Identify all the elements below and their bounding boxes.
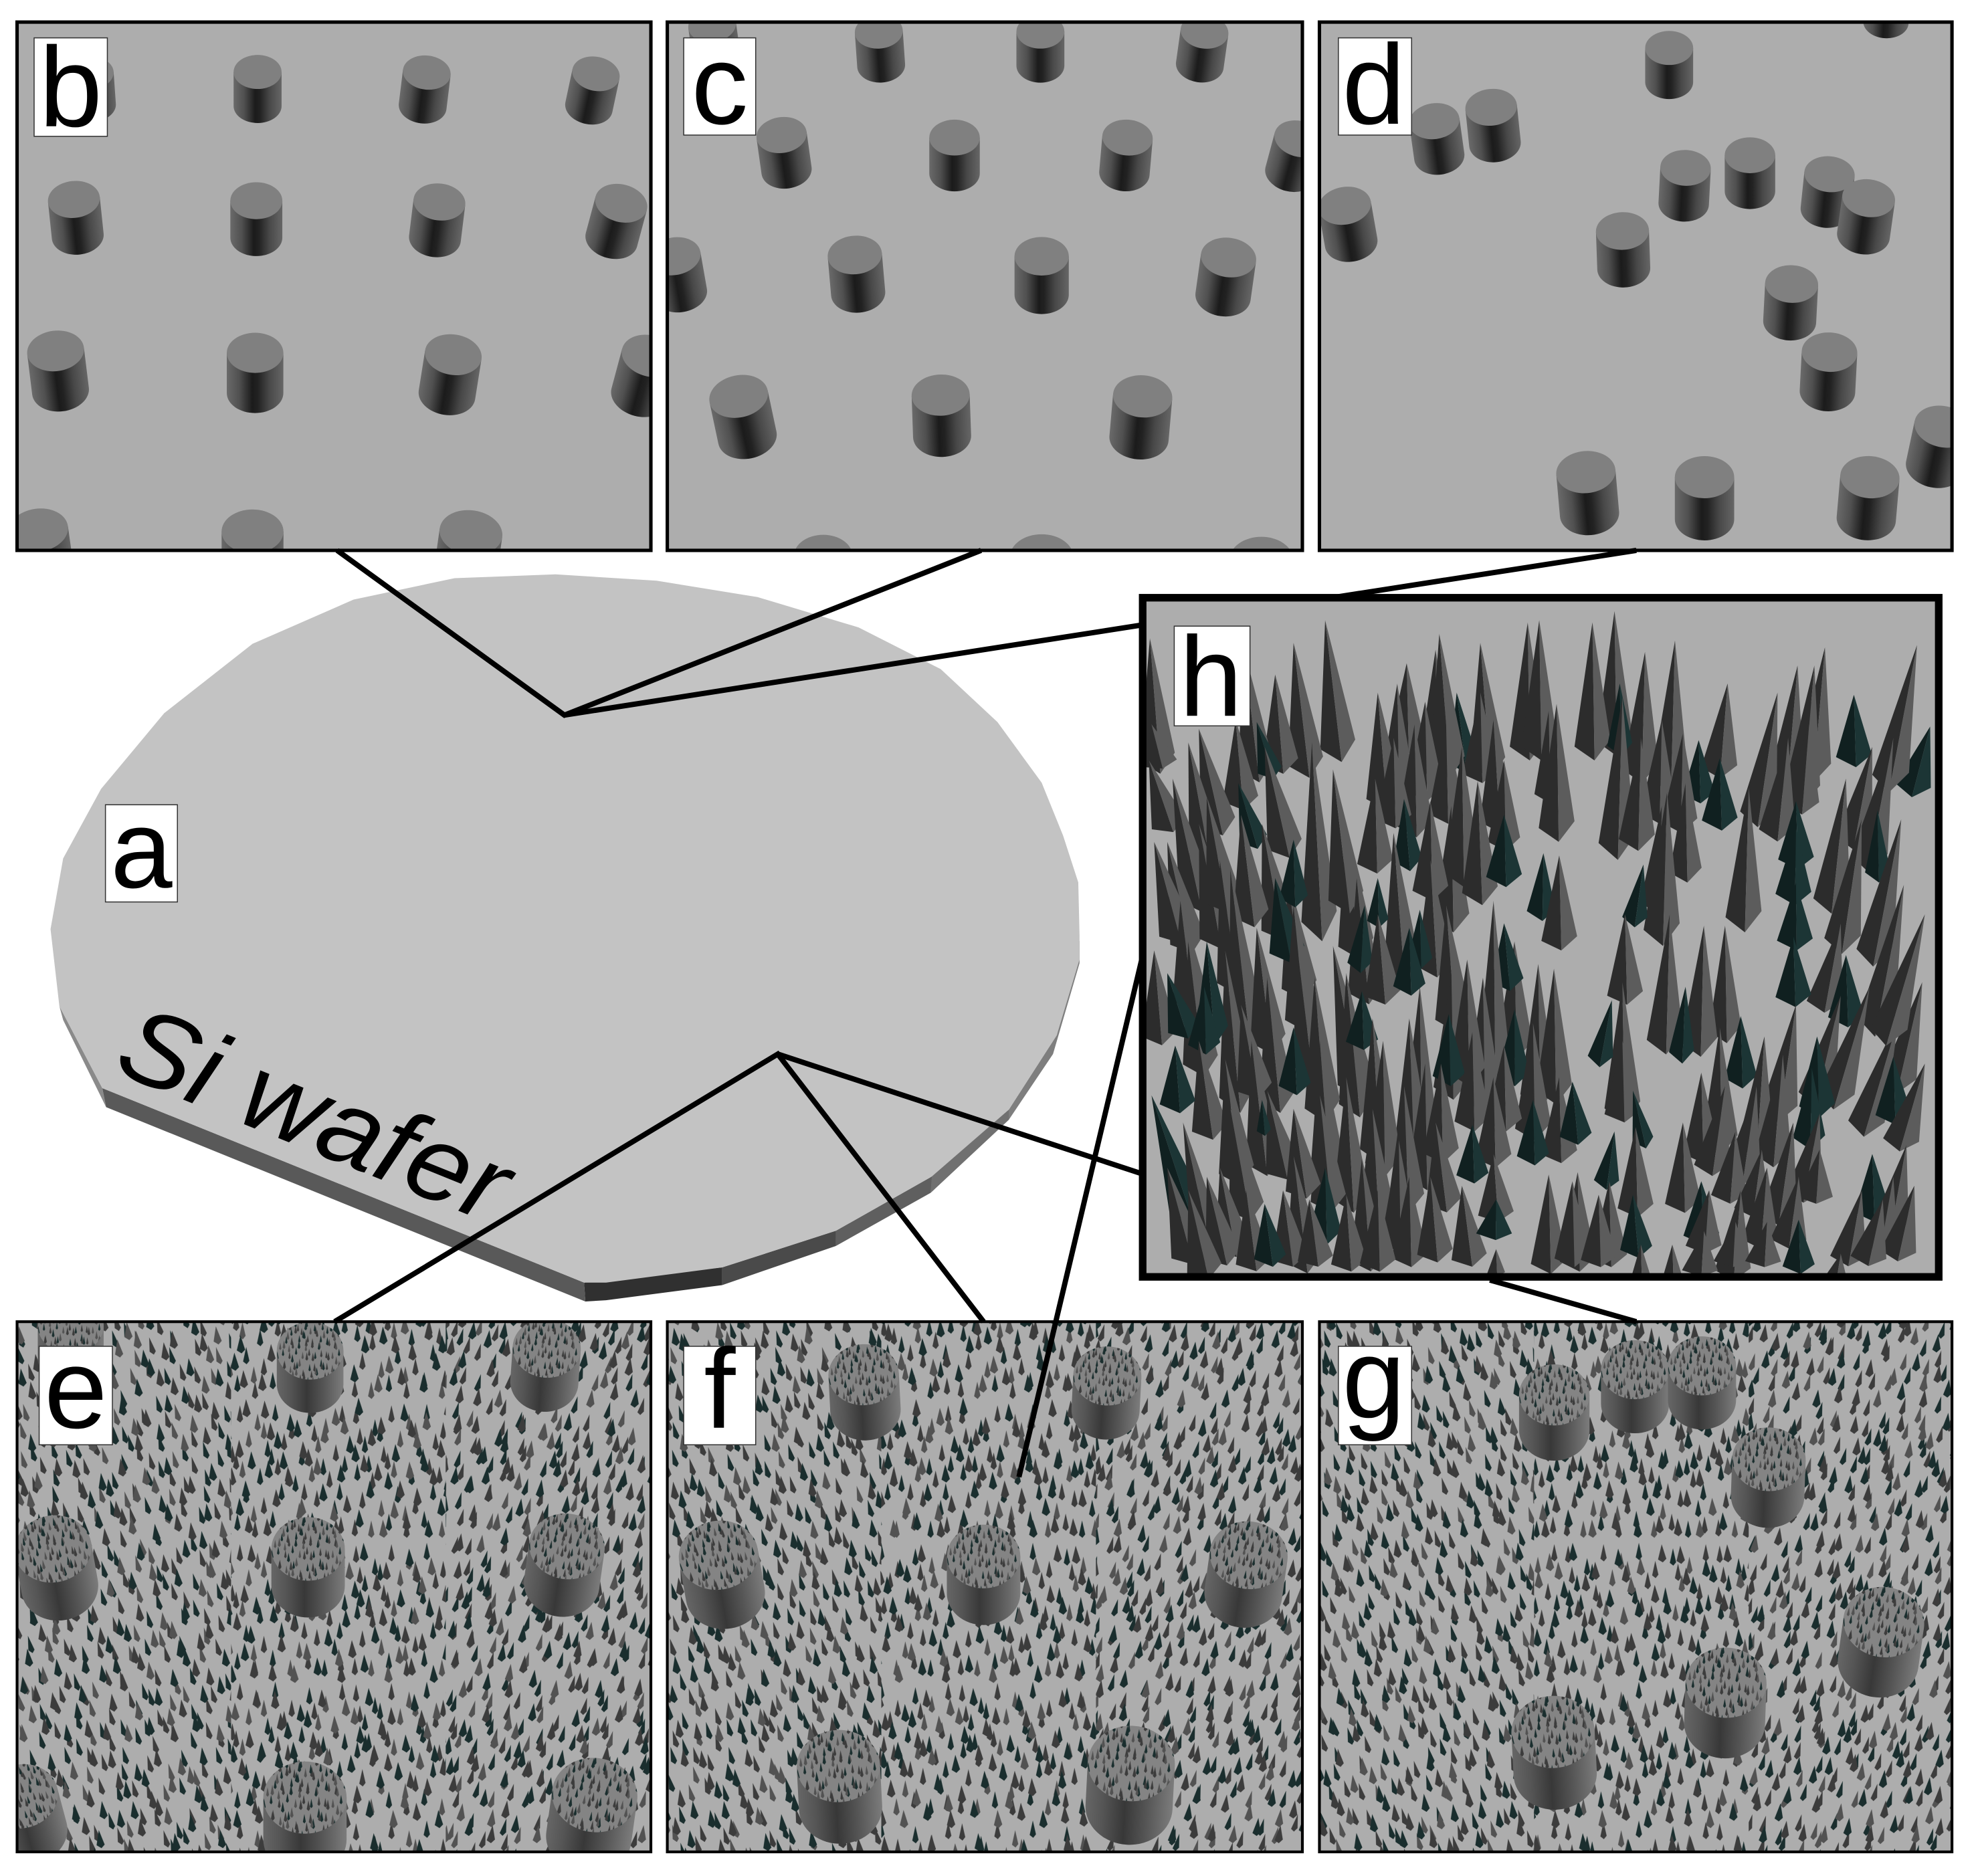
- spike field f: [667, 1322, 1303, 1852]
- pillars g: [1510, 1336, 1929, 1812]
- wafer top surface: [51, 575, 1080, 1283]
- label b: b: [39, 23, 102, 150]
- label g: g: [1342, 1315, 1405, 1442]
- pillars e: [0, 1297, 642, 1876]
- label e: e: [44, 1325, 108, 1452]
- panel b: ordered pillars: [15, 20, 653, 552]
- label h: h: [1179, 613, 1242, 740]
- pillars c: [645, 5, 1328, 627]
- panel f: spikes on staggered pillars: [667, 1322, 1303, 1852]
- panel h: magnified spikes: [1132, 598, 1947, 1285]
- magnified spike field: [1132, 611, 1947, 1285]
- wafer rim: [60, 940, 1080, 1301]
- label f: f: [704, 1325, 736, 1452]
- label d: d: [1342, 21, 1405, 148]
- label a: a: [110, 788, 173, 912]
- pillars f: [674, 1342, 1292, 1847]
- pillars b: [5, 52, 684, 604]
- connector lines: [334, 550, 1636, 1477]
- panel a: Si wafer: [51, 575, 1080, 1301]
- text: Si wafer: Si wafer: [102, 981, 532, 1247]
- label c: c: [691, 21, 748, 148]
- spike field g: [1319, 1322, 1953, 1852]
- panel d: random pillars: [1315, 0, 1976, 550]
- panel g: spikes on random pillars: [1319, 1315, 1953, 1852]
- panel c: staggered pillars: [666, 20, 1304, 552]
- label f: [684, 1325, 756, 1452]
- pillars d: [1315, 0, 1976, 542]
- panel e: spikes on ordered pillars: [0, 1297, 652, 1876]
- spike field e: [17, 1322, 652, 1852]
